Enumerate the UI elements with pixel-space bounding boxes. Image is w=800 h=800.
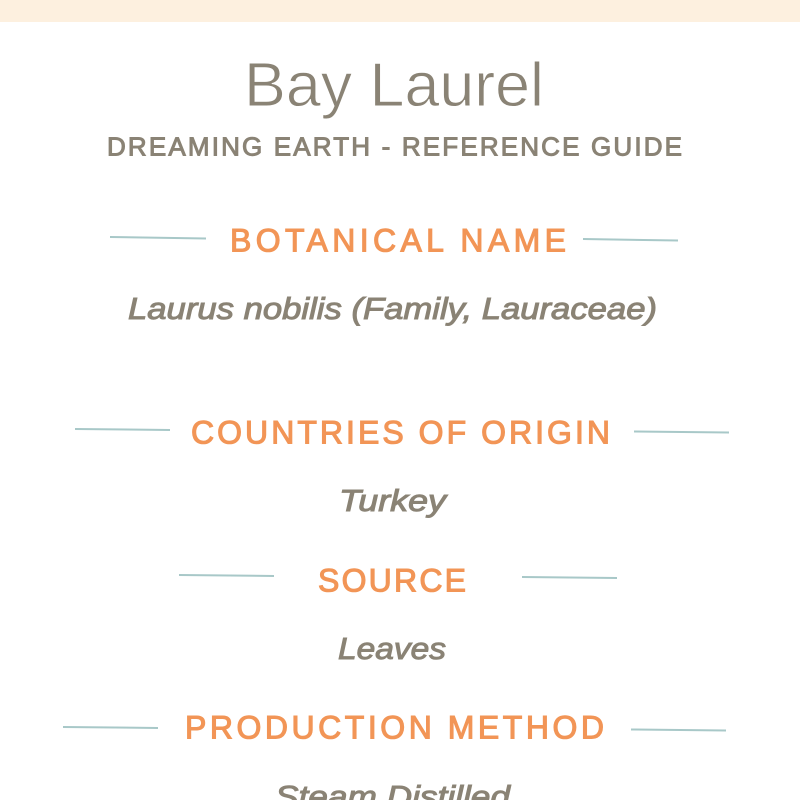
text: countries value: Turkey <box>339 483 449 518</box>
text: source value: Leaves <box>338 631 446 666</box>
section: source <box>179 562 617 666</box>
divider: production left <box>63 727 158 728</box>
heading: botanical name: BOTANICAL NAME <box>230 222 566 258</box>
text: botanical value: Laurus nobilis (Family, Lauraceae) <box>128 291 657 326</box>
title: Bay Laurel <box>244 51 544 120</box>
divider: botanical left <box>110 237 206 238</box>
divider: source left <box>179 575 274 576</box>
heading: production method: PRODUCTION METHOD <box>185 710 604 746</box>
top banner band <box>0 0 800 22</box>
divider: countries left <box>75 429 170 430</box>
section: countries of origin <box>75 414 729 518</box>
section: botanical name <box>110 222 678 326</box>
divider: botanical right <box>583 239 678 240</box>
heading: source: SOURCE <box>318 562 466 598</box>
subtitle: DREAMING EARTH - REFERENCE GUIDE <box>107 132 682 162</box>
divider: production right <box>631 730 726 731</box>
heading: countries of origin: COUNTRIES OF ORIGIN <box>191 414 610 450</box>
divider: source right <box>522 577 617 578</box>
divider: countries right <box>634 432 729 433</box>
section: production method <box>63 710 726 800</box>
